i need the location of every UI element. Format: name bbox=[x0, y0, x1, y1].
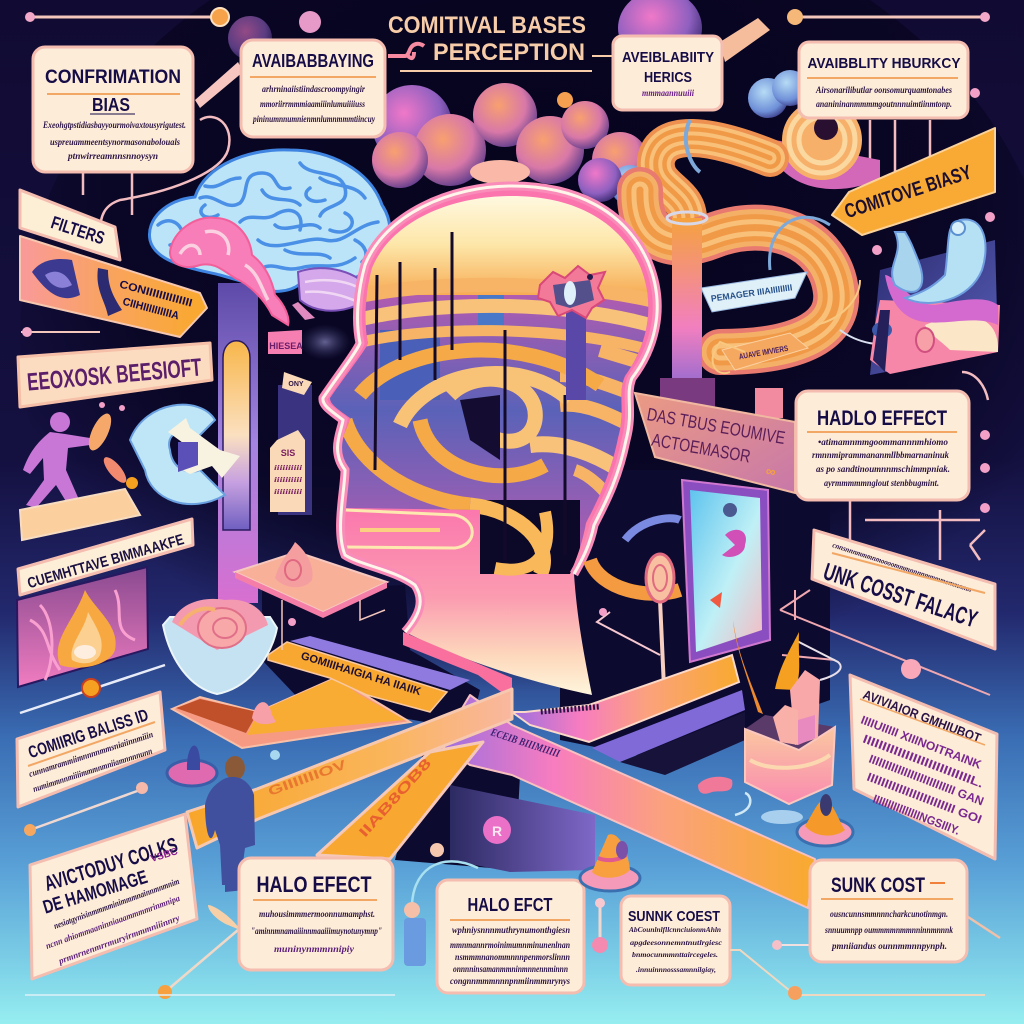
cognitive sign bbox=[832, 128, 995, 235]
panel: availability hburicy bbox=[799, 42, 968, 118]
sign: das tbus bbox=[635, 393, 795, 493]
filters sign: FILTERS bbox=[49, 212, 107, 248]
side column with signs: iiiiiiiiii bbox=[274, 488, 302, 496]
right pipes and tubes: AUAVE IMVIERS bbox=[738, 344, 789, 361]
panel: halo effect 2 bbox=[437, 880, 584, 993]
arrow sign: confirmation bbox=[20, 236, 207, 337]
panel: confirmation bias: Exeohgtpstidiasbayyourmoivaxtousyrigutest. bbox=[42, 120, 186, 130]
right pipes and tubes: PEMAGER IIIAIIIIIIIII bbox=[710, 282, 793, 304]
panel: avictoduy bbox=[30, 814, 197, 979]
dark small cloud bbox=[299, 324, 351, 360]
panel: cuemhttave: CUEMHTTAVE BIMMAAKFE bbox=[26, 531, 186, 592]
right pipes and tubes bbox=[640, 100, 900, 418]
arrow sign: confirmation: CONIIIIIIIIIIIIII bbox=[118, 279, 194, 310]
brain: blue cortex bbox=[149, 150, 390, 291]
panel: availability top left: pininumnnumnienmnlumnmmmtiincuy bbox=[252, 114, 376, 124]
mirror bbox=[682, 480, 770, 662]
panel: halo effect 1 bbox=[239, 858, 393, 970]
panel: availability heuristic: HERICS bbox=[644, 69, 692, 86]
panel: avialator: IIIIUIIIII XIIINOITRAINK bbox=[859, 713, 984, 772]
panel: avictoduy: ncnn ahiommaaninniaaammmmrinmnipa bbox=[44, 893, 182, 951]
panel: confirmation bias: ptnwirreamnnsnnoysyn bbox=[67, 151, 158, 161]
slab left bbox=[20, 489, 140, 540]
panel: sunk coest: AbCounlnlfllcnnciuionmAhln bbox=[628, 925, 721, 934]
icon: walking figure bbox=[23, 402, 138, 508]
head: lower jaw curl bbox=[345, 510, 472, 548]
head: maze interior bbox=[330, 190, 660, 585]
maze: concentric paths bbox=[345, 350, 600, 575]
connector bottom right bbox=[730, 915, 1000, 1000]
panel: availability heuristic: AVEIBLABIITY bbox=[622, 49, 714, 66]
center base box bbox=[450, 785, 595, 872]
panel: halo effect 2: congnnmmmnnnpnmiinmmnrynys bbox=[450, 976, 570, 986]
panel: halo effect main: ayrmmmmmnglout stenbbugmint. bbox=[824, 478, 939, 488]
panel: halo effect 2: onnnninsamanmmninmnnennminnn bbox=[453, 964, 568, 974]
icon: C and arrow bbox=[130, 405, 240, 504]
emblem: keyhole on pole bbox=[538, 266, 605, 400]
panel: unk cost fallacy bbox=[812, 530, 995, 649]
stage: slab bbox=[172, 678, 410, 748]
side column with signs: iiiiiiiiii bbox=[274, 464, 302, 472]
dark machine base behind neck bbox=[262, 470, 830, 870]
panel: halo effect 1: "aminnmnamaiiinnmaaiiimuynotunymnp" bbox=[251, 926, 382, 936]
panel: avictoduy: VSBC bbox=[149, 846, 179, 865]
token: cone left bbox=[167, 746, 280, 786]
tubes bbox=[640, 138, 836, 352]
panel: coming bias bbox=[17, 692, 165, 807]
panel: avialator: IIIIIIIIIIIIIIIIIIIIIIIIIIIIL. bbox=[861, 732, 985, 791]
left connector bead bbox=[20, 665, 165, 713]
curled tubes by mirror bbox=[495, 512, 680, 594]
device vertical bbox=[592, 898, 608, 953]
panel: sunk coest: SUNNK COEST bbox=[628, 908, 720, 925]
device with dot bbox=[404, 843, 478, 966]
pink neck band bbox=[403, 632, 512, 700]
panel: sunk cost: pmniiandus ounnmmnnpynph. bbox=[831, 941, 947, 951]
panel: availability heuristic: mmmaannuuiii bbox=[642, 88, 694, 98]
stage: upper orange band bbox=[268, 642, 447, 712]
side column with signs: SIS bbox=[281, 448, 295, 458]
panel: confirmation bias: CONFRIMATION bbox=[45, 67, 181, 88]
head: outline bbox=[323, 186, 657, 632]
pillar with arch bbox=[218, 283, 258, 603]
token: striped cone bbox=[580, 834, 640, 891]
clouds behind title bbox=[228, 0, 808, 205]
vertical pipe bbox=[672, 218, 702, 418]
panel: avictoduy: AVICTODUY COLKS bbox=[42, 834, 180, 896]
panel: confirmation bias: BIAS bbox=[92, 95, 130, 115]
upper right band bbox=[512, 655, 745, 775]
head: skin and neck bbox=[323, 186, 657, 695]
panel: availability hburicy: Airsonarilibutlar oonsomurquamtonabes bbox=[815, 85, 952, 95]
beam: orange diagonal bbox=[317, 742, 483, 859]
panel: availability top left: AVAIBABBAYING bbox=[252, 51, 374, 71]
panel: availability top left: arhrninaiistiindascroompyingir bbox=[262, 84, 365, 94]
panel: halo effect 2: HALO EFCT bbox=[468, 895, 552, 915]
panel: halo effect 1: HALO EFECT bbox=[256, 872, 372, 897]
panel: halo effect 1: muninynmmnnipiy bbox=[274, 944, 355, 954]
head bbox=[323, 186, 660, 695]
brain: pink frontal lobe bbox=[170, 218, 288, 325]
left stage: GOMIIIHAIGIA HA IIAIIK bbox=[299, 650, 422, 698]
panel: halo effect main bbox=[796, 391, 969, 500]
panel: avialator: IIIIIIIIIIIIIIIIIIIIIIIII GOI bbox=[865, 770, 984, 827]
panel: confirmation bias bbox=[33, 47, 193, 172]
panel: halo effect 2: mmnmannrmoinimumnminunenlnan bbox=[450, 940, 570, 950]
sign: das tbus: ∞ bbox=[765, 462, 777, 480]
left stage bbox=[172, 636, 470, 748]
panel: availability hburicy: AVAIBBLITY HBURKCY bbox=[808, 55, 960, 72]
panel: coming bias: COMIIRIG BALISS ID bbox=[26, 705, 151, 762]
orange label on tube bbox=[722, 333, 808, 370]
panel: avialator: AVIVIAIOR GMHIUBOT bbox=[861, 687, 983, 746]
maze: black verticals bbox=[375, 232, 565, 560]
panel: availability top left: mmoriirrmmmiaamiiinlumuiiiiuss bbox=[260, 99, 365, 109]
right figure: face with blue waves bbox=[870, 219, 1000, 375]
connector lines top bbox=[21, 8, 995, 560]
panel: avictoduy: prmnrnenmrrmuryirmmmniiinnry bbox=[56, 912, 182, 966]
arrow sign: confirmation: CIIHIIIIIIIIIIA bbox=[121, 296, 180, 322]
panel: halo effect 1: muhousimmmermoonnumamphst. bbox=[259, 909, 375, 919]
face bbox=[870, 300, 1000, 374]
dark central backdrop bbox=[20, 0, 1024, 780]
panel: sunk coest: bnmocunmmnttaircegeles. bbox=[632, 950, 718, 959]
side column with signs: iiiiiiiiii bbox=[274, 476, 302, 484]
cognitive sign: COMITOVE BIASY bbox=[842, 161, 975, 223]
eeoxosk banner: EEOXOSK BEESIOFT bbox=[26, 353, 203, 397]
connectors around pot bbox=[597, 590, 990, 695]
beam: right long: ECEIB BIIIMIIIII bbox=[488, 726, 562, 760]
small sign: hiesea: HIESEA bbox=[269, 341, 303, 351]
panel: availability heuristic bbox=[613, 36, 722, 110]
panel: avictoduy: nesiatgynisinmmmminimmmnainnmnmnim bbox=[52, 876, 181, 931]
panel: sunk cost: snnuumnpp oummmmnmmnninnmnnnk bbox=[824, 925, 953, 935]
title: PERCEPTION bbox=[433, 39, 585, 66]
beam: right long bbox=[440, 695, 815, 908]
blue waves bbox=[892, 232, 922, 292]
hair bbox=[885, 275, 998, 325]
swirl bbox=[775, 100, 880, 189]
flame panel bbox=[17, 567, 148, 687]
panel: sunk coest: .innuinnnosssamnnilgiay, bbox=[636, 965, 716, 974]
panel: halo effect 2: wphniysnnnmuthrynumonthgiesn bbox=[452, 925, 570, 935]
panel: halo effect main: HADLO EFFECT bbox=[817, 407, 947, 430]
panel: halo effect main: •atimamnmmgoommannnmhiomo bbox=[818, 437, 949, 447]
side column with signs bbox=[270, 372, 312, 515]
panel: availability top left bbox=[241, 40, 385, 137]
lollipop spiral bbox=[646, 554, 674, 710]
title bbox=[388, 12, 612, 71]
panel: avialator: IIIIIIIIIIIIIIIINGSIIIY. bbox=[871, 792, 962, 838]
panel: coming bias: numimmnnmiiiimmmnmniiamnnnnunn bbox=[32, 746, 154, 794]
panel: avictoduy: DE HAMOMAGE bbox=[41, 867, 150, 919]
panel: coming bias: cunnamrammiimnnnnmmsniaiinnmiiin bbox=[28, 729, 154, 779]
connector bottom left bbox=[25, 905, 395, 999]
bowl bbox=[163, 599, 277, 694]
panel: availability hburicy: ananininanmmmmgoutnnnuimtiinmtonp. bbox=[816, 99, 952, 109]
beam: orange diagonal: IIAB8OB8 bbox=[355, 755, 434, 840]
panel: sunk cost: ousncunnsmmnnncharkcunotinmgn. bbox=[830, 909, 948, 919]
backdrop bbox=[870, 240, 998, 375]
panel: halo effect main: rmnnmiprammananmllbbmarnaninuk bbox=[812, 450, 949, 460]
panel: halo effect 2: nsmmmnanommnnnpenmorslinnn bbox=[455, 952, 570, 962]
title: COMITIVAL BASES bbox=[388, 12, 586, 39]
person bbox=[205, 756, 255, 892]
panel: sunk cost: SUNK COST bbox=[831, 874, 925, 897]
panel: unk cost fallacy: cnnsnnnmmmnmoooommmnnnnmmmmommnmn bbox=[831, 540, 973, 594]
beam: yellow left bbox=[187, 689, 512, 848]
white label on tube bbox=[701, 272, 807, 312]
panel: sunk coest: apgdeesonnemntnutlrgiesc bbox=[630, 938, 723, 947]
sign: das tbus: DAS TBUS EOUMIVE bbox=[645, 404, 787, 448]
shelf with swirl bbox=[235, 542, 387, 650]
panel: avialator bbox=[850, 675, 997, 859]
sign: das tbus: ACTOEMASOR bbox=[650, 430, 752, 467]
panel: avialator: IIIIIIIIIIIIIIIIIIIIIIIIIII GAN bbox=[867, 752, 986, 809]
pot with blocks and flame bbox=[733, 620, 835, 804]
stage: cone bbox=[252, 702, 276, 724]
filters sign bbox=[20, 190, 120, 260]
panel: halo effect main: as po sandtinoumnnmschimmpniak. bbox=[816, 464, 950, 474]
brain: cerebellum bbox=[298, 268, 372, 311]
brain bbox=[149, 150, 390, 325]
connector left bead lower bbox=[24, 782, 148, 836]
side column with signs: ONY bbox=[288, 381, 304, 388]
panel: confirmation bias: uspreuammeentsynormasonabolouals bbox=[50, 137, 180, 147]
panel: sunk cost bbox=[810, 860, 967, 962]
center base box: R bbox=[492, 823, 502, 839]
brain: folds bbox=[158, 163, 378, 280]
panel: sunk coest bbox=[621, 896, 730, 985]
eeoxosk banner bbox=[18, 343, 212, 407]
small sign: hiesea bbox=[268, 330, 303, 354]
tokens right bbox=[698, 777, 853, 846]
maze: rear walls bbox=[350, 285, 650, 505]
upper right band: IIIIIIIIIIIIIIII bbox=[540, 702, 600, 717]
beam: yellow left: GIIIIIIIOV bbox=[266, 757, 349, 799]
